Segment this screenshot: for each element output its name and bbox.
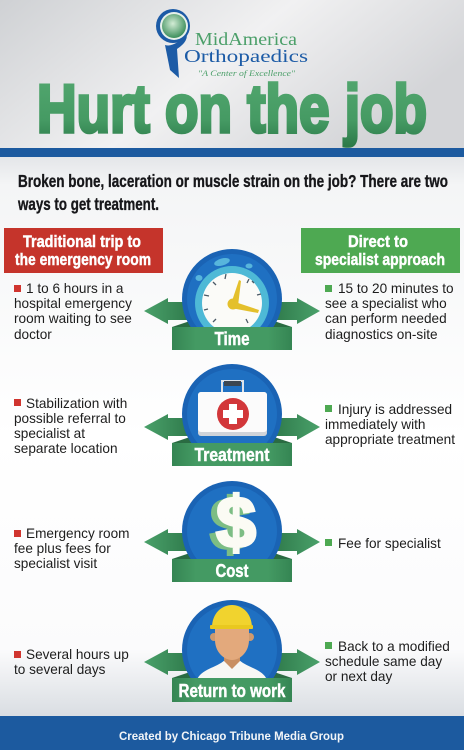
- icon: dollar: $: [210, 485, 250, 565]
- right text: return to work: Back to a modified: [338, 639, 450, 654]
- row: cost: [144, 481, 320, 582]
- intro text: ways to get treatment.: [17, 194, 159, 214]
- right text: treatment: Injury is addressed: [338, 402, 452, 417]
- arrows: cost: [144, 529, 320, 555]
- left text: treatment: separate location: [14, 441, 118, 456]
- ribbon: treatment: [172, 443, 292, 466]
- logo: Orthopaedics: Orthopaedics: [184, 46, 308, 66]
- right text: time: [325, 281, 454, 342]
- heading: traditional trip: [4, 228, 163, 273]
- logo: MidAmerica: MidAmerica: [195, 29, 297, 49]
- ribbon: return to work: Return to work: [178, 681, 286, 701]
- right text: return to work: or next day: [325, 669, 392, 684]
- icon: worker: [182, 600, 282, 700]
- intro text: [17, 171, 448, 214]
- left text: time: [14, 281, 132, 342]
- left text: treatment: [14, 396, 127, 456]
- left text: return to work: Several hours up: [26, 647, 129, 662]
- right text: return to work: [325, 639, 450, 684]
- arrows: return to work: [144, 649, 320, 675]
- ribbon: cost: Cost: [216, 561, 249, 581]
- row: return to work: [144, 600, 320, 702]
- left text: time: hospital emergency: [14, 296, 132, 311]
- left text: cost: Emergency room: [26, 526, 130, 541]
- icon: dollar: [182, 481, 282, 581]
- heading: traditional trip: the emergency room: [15, 250, 151, 269]
- row: time: [144, 249, 320, 350]
- right text: time: see a specialist who: [325, 296, 447, 311]
- footer: [0, 716, 464, 750]
- header background: [0, 0, 464, 148]
- left text: time: 1 to 6 hours in a: [26, 281, 124, 296]
- left text: treatment: specialist at: [14, 426, 85, 441]
- ribbon: time: [172, 327, 292, 350]
- right text: treatment: immediately with: [325, 417, 425, 432]
- left text: cost: [14, 526, 130, 571]
- ribbon flaps: return to work: [172, 672, 292, 678]
- heading: direct to specialist: [301, 228, 460, 273]
- heading: direct to specialist: Direct to: [348, 232, 408, 251]
- right text: cost: Fee for specialist: [338, 536, 441, 551]
- left text: treatment: possible referral to: [14, 411, 126, 426]
- left text: time: doctor: [14, 327, 52, 342]
- left text: cost: specialist visit: [14, 556, 97, 571]
- icon: clock: [182, 249, 282, 349]
- footer: Created by Chicago Tribune Media Group: [119, 731, 344, 743]
- ribbon: treatment: Treatment: [194, 445, 270, 465]
- left text: cost: fee plus fees for: [14, 541, 111, 556]
- left text: return to work: [14, 647, 129, 677]
- ribbon flaps: cost: [172, 553, 292, 559]
- left text: treatment: Stabilization with: [26, 396, 127, 411]
- left text: time: room waiting to see: [14, 311, 132, 326]
- right text: treatment: [325, 402, 455, 447]
- icon: dollar: $: [216, 483, 256, 563]
- ribbon flaps: time: [172, 321, 292, 327]
- right text: return to work: schedule same day: [325, 654, 442, 669]
- row: treatment: [144, 364, 320, 466]
- right text: treatment: appropriate treatment: [325, 432, 455, 447]
- page background: [0, 157, 464, 717]
- ribbon: time: Time: [214, 329, 250, 349]
- icon: medical case: [182, 364, 282, 464]
- right text: time: can perform needed: [325, 311, 447, 326]
- blue divider bar: [0, 148, 464, 157]
- logo: [156, 9, 308, 78]
- left text: return to work: to several days: [14, 662, 106, 677]
- arrows: treatment: [144, 414, 320, 440]
- ribbon: cost: [172, 559, 292, 582]
- ribbon flaps: treatment: [172, 437, 292, 443]
- arrows: time: [144, 298, 320, 324]
- logo: tagline: "A Center of Excellence": [198, 69, 296, 78]
- heading: traditional trip: Traditional trip to: [23, 232, 141, 251]
- right text: time: 15 to 20 minutes to: [338, 281, 454, 296]
- right text: time: diagnostics on-site: [325, 327, 438, 342]
